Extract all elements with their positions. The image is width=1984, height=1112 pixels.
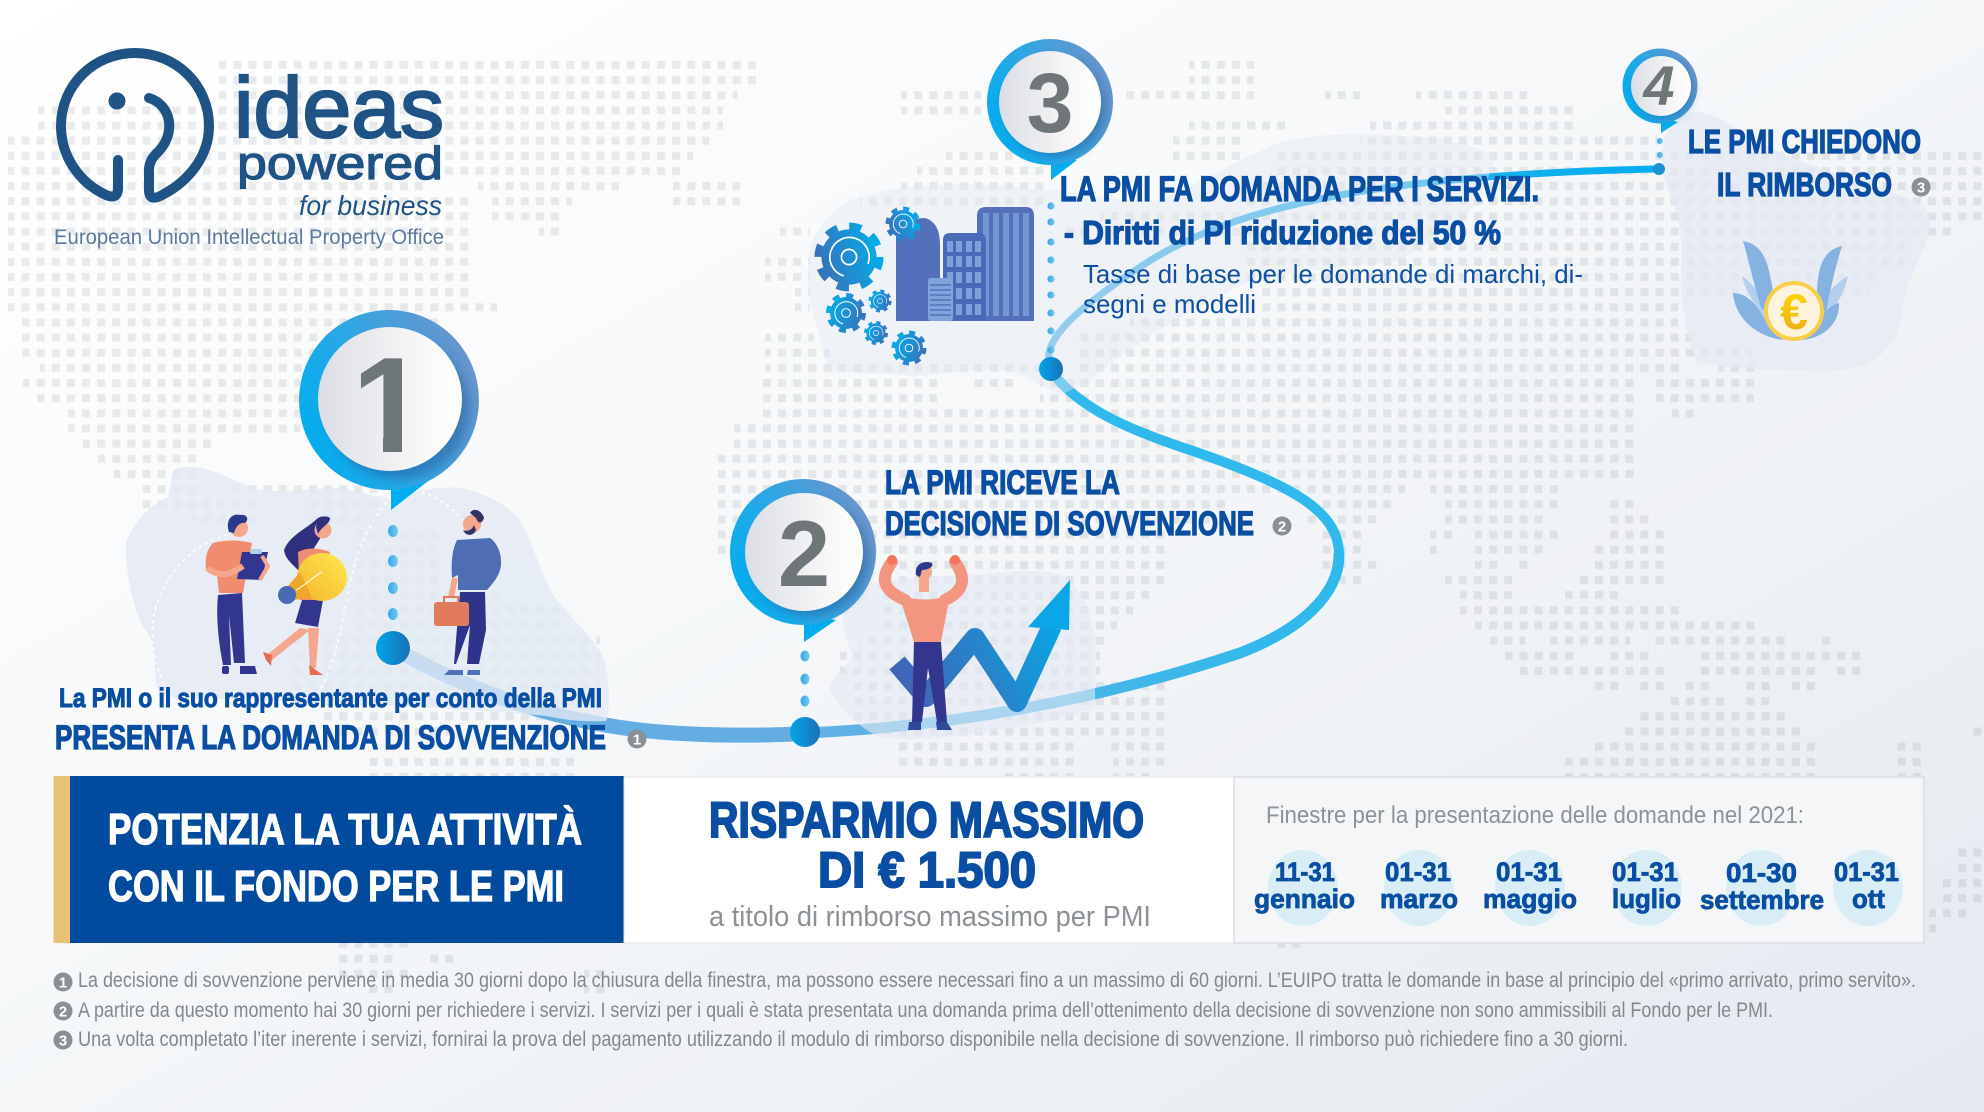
connector dots: step 1	[376, 525, 410, 665]
window: September: 01-30	[1726, 858, 1797, 888]
footnote 3: Una volta completato l’iter inerente i servizi, fornirai la prova del pagamento utilizzando il modulo di rimborso disponibile nella decisione di sovvenzione. Il rimborso può richiedere fino a 30 giorni.	[78, 1028, 1628, 1051]
logo: ideas powered for business	[54, 53, 444, 249]
footnote 2: 2	[59, 1004, 67, 1020]
illustration: gears and buildings	[819, 207, 1034, 363]
step 4 text: LE PMI CHIEDONO	[1688, 123, 1921, 160]
footnote 3: 3	[59, 1032, 67, 1050]
step 3 text	[1060, 170, 1583, 319]
window: July: luglio	[1612, 884, 1681, 914]
logo mark	[61, 53, 209, 198]
window: May: 01-31	[1496, 857, 1562, 887]
step 2 text: LA PMI RICEVE LA	[885, 464, 1120, 502]
buildings	[896, 207, 1034, 321]
footnote marker 1	[628, 730, 646, 748]
window: October: ott	[1852, 884, 1885, 914]
icon: euro coin with leaves: €	[1780, 284, 1808, 340]
step 2 text: DECISIONE DI SOVVENZIONE	[885, 505, 1254, 543]
connector dots: step 4	[1653, 138, 1665, 175]
step 3 text: Tasse di base per le domande di marchi, di-	[1083, 259, 1583, 289]
step 4 text	[1688, 123, 1930, 203]
banner: white savings panel	[624, 777, 1234, 943]
step 3 text: segni e modelli	[1083, 289, 1256, 319]
road connecting the four steps	[393, 169, 1654, 735]
step 4 text: IL RIMBORSO	[1717, 166, 1892, 203]
gears	[819, 209, 924, 363]
footnote marker 1: 1	[633, 732, 641, 748]
logo word ideas: ideas	[234, 61, 444, 156]
step number 4: 4	[1642, 54, 1675, 117]
banner: grey windows panel	[1234, 777, 1924, 943]
step number 3: 3	[1027, 56, 1073, 150]
window: October: 01-31	[1834, 857, 1899, 887]
window: January: 11-31	[1275, 857, 1335, 887]
window: March: 01-31	[1385, 857, 1451, 887]
window: October	[1833, 850, 1903, 926]
footnotes	[54, 969, 1916, 1051]
logo word for business: for business	[299, 190, 442, 221]
connector dots: step 2	[790, 650, 820, 747]
step 1 text: PRESENTA LA DOMANDA DI SOVVENZIONE	[55, 719, 606, 757]
pin: step 3	[987, 39, 1113, 180]
savings heading	[709, 792, 1151, 933]
icon: euro coin with leaves	[1733, 241, 1848, 341]
banner: blue title panel	[70, 776, 624, 943]
blob backgrounds behind illustrations	[126, 112, 1931, 739]
footnote marker 2: 2	[1278, 518, 1286, 536]
window: March: marzo	[1380, 884, 1458, 914]
illustration: three people with light bulb	[206, 510, 501, 675]
step 3 text: - Diritti di PI riduzione del 50 %	[1064, 214, 1501, 251]
footnote marker 3	[1912, 178, 1930, 196]
savings heading: a titolo di rimborso massimo per PMI	[709, 901, 1151, 933]
window: March	[1380, 850, 1458, 926]
man with briefcase	[434, 510, 501, 675]
bottom banner	[54, 776, 1924, 943]
banner title	[108, 804, 582, 911]
step 1 text: La PMI o il suo rappresentante per conto della PMI	[59, 683, 602, 713]
pin: step 1	[299, 310, 479, 510]
window: May: maggio	[1483, 884, 1577, 914]
man raising arms	[885, 555, 962, 730]
step 3 text: LA PMI FA DOMANDA PER I SERVIZI.	[1060, 170, 1539, 209]
dashed orbit in step 1 blob	[152, 490, 462, 715]
step 1 text	[55, 683, 646, 757]
window: September	[1700, 850, 1824, 926]
pin: step 4	[1622, 48, 1698, 133]
banner: gold accent bar	[54, 776, 70, 943]
banner title: POTENZIA LA TUA ATTIVITÀ	[108, 804, 582, 854]
step 2 text	[885, 464, 1292, 543]
window: January: gennaio	[1254, 884, 1355, 914]
growth arrow	[897, 580, 1070, 702]
banner title: CON IL FONDO PER LE PMI	[108, 862, 564, 911]
footnote marker 2	[1272, 516, 1292, 536]
connector dots: step 3	[1039, 202, 1063, 381]
savings heading: RISPARMIO MASSIMO	[709, 792, 1144, 848]
woman carrying light bulb	[263, 516, 347, 675]
footnote 1: 1	[59, 974, 67, 992]
logo organisation name: European Union Intellectual Property Office	[54, 226, 444, 249]
step number 1: 1	[352, 329, 427, 481]
window: May	[1483, 850, 1577, 926]
person with clipboard	[206, 515, 268, 674]
savings heading: DI € 1.500	[818, 842, 1036, 898]
illustration: man and growth arrow	[885, 555, 1070, 730]
application windows heading: Finestre per la presentazione delle domande nel 2021:	[1266, 802, 1804, 829]
window: September: settembre	[1700, 885, 1824, 915]
logo word powered: powered	[237, 137, 443, 189]
footnote marker 3: 3	[1917, 180, 1925, 196]
step number 2: 2	[778, 501, 830, 606]
window: July	[1612, 850, 1682, 926]
pin: step 2	[730, 479, 876, 642]
window: January	[1254, 850, 1355, 926]
window: July: 01-31	[1612, 857, 1678, 887]
